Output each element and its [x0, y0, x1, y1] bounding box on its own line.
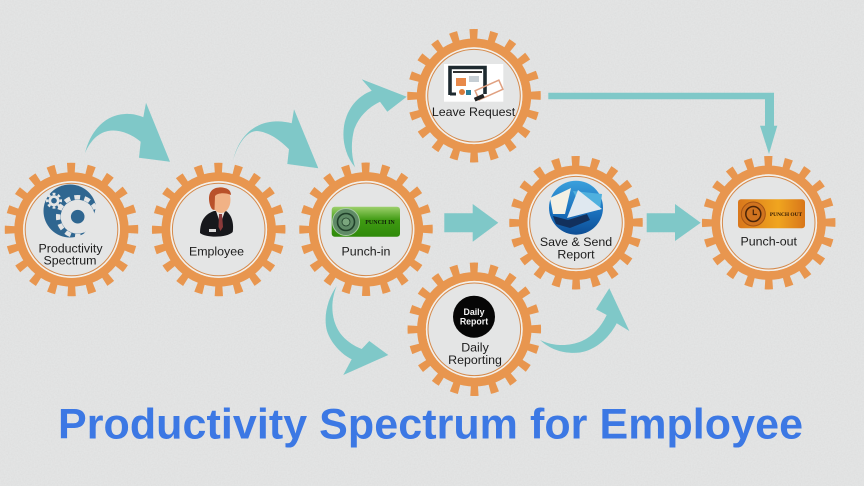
node: Leave Request	[412, 34, 536, 157]
icon: mail globe	[549, 181, 603, 235]
node: Employee	[157, 168, 280, 291]
icon: daily report badge	[453, 296, 495, 338]
label: Punch-out	[740, 234, 797, 248]
icon: employee	[200, 187, 233, 237]
arrow: Punch-in to Save and Send	[444, 204, 498, 242]
label: Punch-in	[342, 244, 391, 258]
node: Productivity Spectrum	[10, 168, 133, 291]
icon: punch-in button: PUNCH IN	[365, 220, 395, 226]
label: Reporting	[448, 353, 502, 367]
icon: daily report badge: Report	[460, 316, 488, 326]
label: Save & Send	[540, 235, 612, 249]
label: Report	[557, 248, 595, 262]
node: Punch-out	[707, 161, 830, 284]
arrow: Save and Send to Punch-out	[647, 204, 701, 241]
label: Productivity	[38, 242, 103, 256]
label: Employee	[189, 244, 244, 258]
arrow: Leave Request to Punch-out	[548, 93, 777, 154]
arrow: Daily Reporting to Save and Send	[540, 288, 629, 353]
title: Productivity Spectrum for Employee	[58, 400, 803, 448]
label: Leave Request	[432, 105, 516, 119]
icon: daily report badge: Daily	[463, 307, 485, 317]
node: Save and Send Report	[514, 161, 638, 284]
arrow: Productivity Spectrum to Employee	[85, 103, 170, 162]
icon: gears globe	[44, 184, 100, 240]
arrow: Punch-in to Daily Reporting	[326, 286, 388, 375]
icon: leave request	[444, 64, 503, 102]
node: Daily Reporting	[413, 268, 536, 391]
icon: punch-out button: PUNCH OUT	[770, 212, 802, 218]
label: Daily	[461, 341, 490, 355]
arrow: Employee to Punch-in	[233, 109, 318, 168]
arrow: Punch-in to Leave Request	[343, 79, 407, 167]
node: Punch-in	[304, 168, 428, 291]
label: Spectrum	[43, 254, 97, 268]
